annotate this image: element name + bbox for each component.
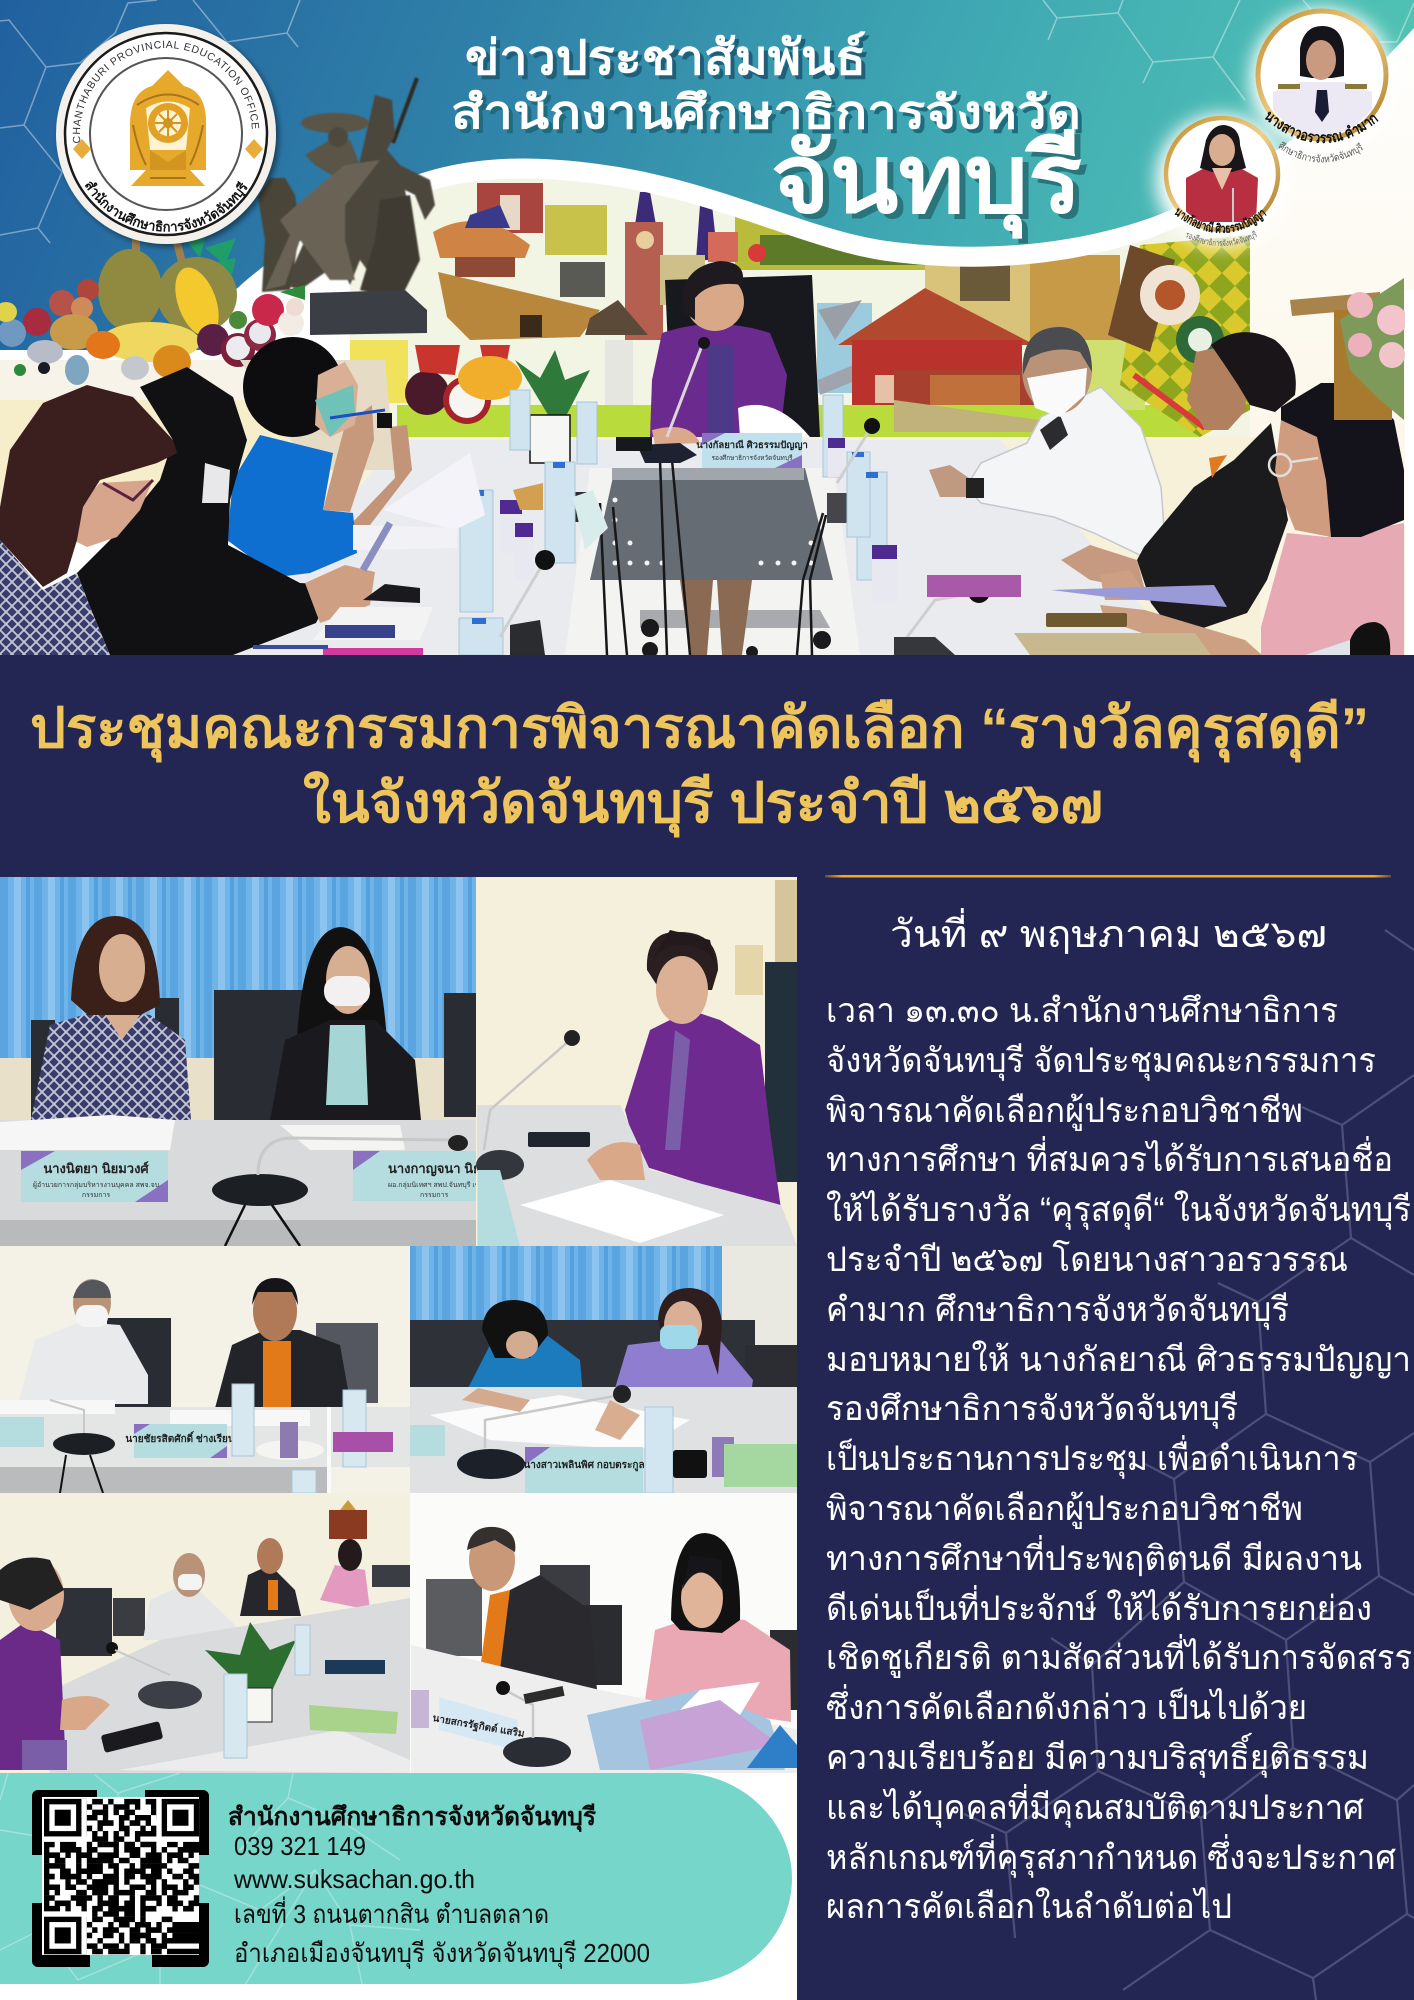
church bbox=[625, 192, 738, 340]
nameplate bbox=[21, 1151, 168, 1202]
modesty panel bbox=[590, 468, 833, 580]
divider rule bbox=[825, 875, 1391, 878]
body text bbox=[826, 992, 1412, 1926]
body text: พิจารณาคัดเลือกผู้ประกอบวิชาชีพ bbox=[826, 1490, 1303, 1529]
brochure bbox=[1051, 585, 1227, 607]
caption: deputy education officer: รองศึกษาธิการจังหวัดจันทบุรี bbox=[1186, 230, 1257, 246]
body text: พิจารณาคัดเลือกผู้ประกอบวิชาชีพ bbox=[826, 1092, 1303, 1131]
plant and pot bbox=[515, 350, 590, 463]
nameplate: chair bbox=[696, 433, 808, 468]
contact details: www.suksachan.go.th bbox=[233, 1864, 475, 1894]
nameplate: นางนิตยา นิยมวงศ์ bbox=[43, 1161, 149, 1176]
body text: ให้ได้รับรางวัล “คุรุสดุดี“ ในจังหวัดจันทบุรี bbox=[826, 1190, 1411, 1230]
photo: wide angle of meeting room bbox=[0, 1493, 410, 1773]
panel: news column bbox=[797, 875, 1414, 2000]
photo: two women writing bbox=[410, 1246, 797, 1493]
emblem bbox=[130, 70, 206, 186]
table microphone bbox=[476, 1030, 580, 1180]
body text: เวลา ๑๓.๓๐ น.สำนักงานศึกษาธิการ bbox=[826, 992, 1338, 1030]
title line two: ในจังหวัดจันทบุรี ประจำปี ๒๕๖๗ bbox=[303, 770, 1103, 838]
body text: ทางการศึกษา ที่สมควรได้รับการเสนอชื่อ bbox=[826, 1136, 1393, 1179]
contact details: สำนักงานศึกษาธิการจังหวัดจันทบุรี bbox=[228, 1803, 597, 1833]
caption: provincial education officer bbox=[1265, 112, 1378, 162]
caption: provincial education officer: ศึกษาธิการจังหวัดจันทบุรี bbox=[1278, 142, 1363, 162]
contact details: เลขที่ 3 ถนนตากสิน ตำบลตลาด bbox=[234, 1896, 549, 1929]
contact details bbox=[228, 1803, 650, 1969]
right attendees bbox=[927, 326, 1404, 655]
banner heading: ข่าวประชาสัมพันธ์ bbox=[465, 31, 866, 85]
table and floor bbox=[234, 437, 1148, 655]
body text: ดีเด่นเป็นที่ประจักษ์ ให้ได้รับการยกย่อง bbox=[826, 1585, 1372, 1628]
microphone bbox=[212, 1135, 468, 1246]
microphone bbox=[457, 1385, 631, 1479]
statue base bbox=[310, 290, 427, 335]
body text: มอบหมายให้ นางกัลยาณี ศิวธรรมปัญญา bbox=[826, 1340, 1411, 1379]
gazebo bbox=[585, 300, 648, 335]
banner heading: สำนักงานศึกษาธิการจังหวัด bbox=[451, 87, 1081, 138]
portrait: provincial education officer bbox=[1258, 11, 1386, 140]
panel: contact pill bbox=[0, 1773, 792, 1985]
body text: เป็นประธานการประชุม เพื่อดำเนินการ bbox=[826, 1435, 1358, 1479]
contact details: 039 321 149 bbox=[234, 1831, 366, 1861]
photo: chairperson in purple bbox=[476, 877, 797, 1246]
banner heading: จันทบุรี bbox=[771, 126, 1082, 239]
photo: man and woman in pink reviewing papers bbox=[410, 1493, 800, 1773]
hexagon lines bbox=[0, 0, 1414, 243]
woven mat bbox=[1108, 235, 1250, 437]
caption: provincial education officer: นางสาวอรวรรณ คำมาก bbox=[1265, 112, 1378, 144]
red house bbox=[838, 288, 1040, 432]
water bottles bbox=[232, 1384, 366, 1493]
nameplate bbox=[353, 1151, 506, 1201]
white wave bbox=[405, 170, 1180, 267]
white glow behind portraits bbox=[1250, 8, 1394, 152]
woman in pink bbox=[1261, 523, 1404, 655]
woman behind raised arm bbox=[350, 425, 412, 525]
chair base bbox=[640, 610, 831, 658]
tropical fruit mural bbox=[405, 371, 449, 415]
boat bbox=[438, 272, 600, 340]
cables bbox=[600, 460, 826, 655]
nameplate: ผู้อำนวยการกลุ่มบริหารงานบุคคล สพจ.จบ bbox=[33, 1181, 159, 1189]
water bottles bbox=[459, 390, 887, 655]
date: วันที่ ๙ พฤษภาคม ๒๕๖๗ bbox=[890, 908, 1327, 956]
nameplate: กรรมการ bbox=[420, 1192, 449, 1199]
contact details: อำเภอเมืองจันทบุรี จังหวัดจันทบุรี 22000 bbox=[234, 1938, 650, 1969]
papers bbox=[383, 453, 485, 530]
wall behind men bbox=[1090, 437, 1260, 655]
logo badge bbox=[56, 24, 282, 250]
nameplate bbox=[523, 1447, 645, 1493]
nameplate: นายสกรรัฐกิตต์ แสริม bbox=[432, 1712, 525, 1740]
nameplate: chair: นางกัลยาณี ศิวธรรมปัญญา bbox=[696, 439, 808, 451]
nameplate bbox=[125, 1424, 235, 1458]
man in white coat bbox=[966, 387, 1164, 557]
photo: two committee women bbox=[0, 877, 506, 1246]
banner heading: สำนักงานศึกษาธิการจังหวัด bbox=[455, 91, 1085, 142]
body text: หลักเกณฑ์ที่คุรุสภากำหนด ซึ่งจะประกาศ bbox=[826, 1834, 1396, 1878]
woman with glasses bbox=[73, 480, 153, 547]
table plant bbox=[205, 1622, 296, 1722]
nameplate: chair: รองศึกษาธิการจังหวัดจันทบุรี bbox=[712, 454, 793, 462]
woman in blue bbox=[227, 435, 357, 577]
woman in black bbox=[77, 367, 335, 655]
left attendees bbox=[0, 337, 485, 655]
microphone bbox=[496, 1681, 571, 1767]
booklet and papers bbox=[313, 607, 433, 640]
nameplate: นายชัยรสิตศักดิ์ ช่างเรียน bbox=[125, 1431, 235, 1445]
body text: ความเรียบร้อย มีความบริสุทธิ์ยุติธรรม bbox=[826, 1732, 1369, 1778]
water and dolphin bbox=[817, 303, 872, 393]
milk boxes and tent card bbox=[500, 438, 897, 603]
banner heading bbox=[451, 31, 1088, 244]
logo badge: CHANTHABURI PROVINCIAL EDUCATION OFFICE bbox=[72, 40, 260, 143]
banner heading: ข่าวประชาสัมพันธ์ bbox=[469, 35, 870, 89]
legs bbox=[680, 580, 752, 655]
body text: ทางการศึกษาที่ประพฤติตนดี มีผลงาน bbox=[826, 1535, 1362, 1578]
blue teal wave bbox=[0, 0, 1414, 350]
chairperson bbox=[616, 261, 820, 463]
body text: รองศึกษาธิการจังหวัดจันทบุรี bbox=[826, 1390, 1238, 1429]
portrait: deputy education officer bbox=[1166, 118, 1278, 230]
caption: deputy education officer bbox=[1174, 208, 1267, 246]
body text: จังหวัดจันทบุรี จัดประชุมคณะกรรมการ bbox=[826, 1042, 1376, 1081]
table microphones bbox=[500, 418, 990, 655]
mural backdrop bbox=[350, 170, 1250, 440]
nameplate: นางสาวเพลินพิศ กอบตระกูล bbox=[523, 1459, 645, 1472]
panel: title band bbox=[0, 655, 1414, 877]
statue of King Taksin bbox=[258, 78, 435, 300]
logo badge: สำนักงานศึกษาธิการจังหวัดจันทบุรี bbox=[85, 180, 248, 232]
fruits and gems bbox=[0, 227, 305, 400]
cloth behind bbox=[240, 360, 395, 470]
body text: ประจำปี ๒๕๖๗ โดยนางสาวอรวรรณ bbox=[826, 1240, 1348, 1279]
caption: deputy education officer: นางกัลยาณี ศิวธรรมปัญญา bbox=[1174, 208, 1267, 234]
body text: ซึ่งการคัดเลือกดังกล่าว เป็นไปด้วย bbox=[826, 1684, 1307, 1727]
flower stand bbox=[1290, 278, 1407, 420]
photo: two men in white coat and black suit bbox=[0, 1246, 410, 1493]
nameplate bbox=[432, 1697, 525, 1751]
body text: ผลการคัดเลือกในลำดับต่อไป bbox=[826, 1887, 1232, 1926]
body text: และได้บุคคลที่มีคุณสมบัติตามประกาศ bbox=[826, 1784, 1364, 1828]
panel: header banner bbox=[0, 0, 1414, 655]
title line one: ประชุมคณะกรรมการพิจารณาคัดเลือก “รางวัลคุรุสดุดี” bbox=[30, 696, 1369, 763]
body text: คำมาก ศึกษาธิการจังหวัดจันทบุรี bbox=[826, 1291, 1289, 1330]
QR code bbox=[32, 1790, 209, 1967]
banner heading: จันทบุรี bbox=[777, 131, 1088, 244]
microphone bbox=[50, 1400, 115, 1493]
nameplate: นางกาญจนา นิยนนา bbox=[388, 1161, 506, 1177]
man in black suit bbox=[1137, 423, 1288, 637]
nameplate: ผอ.กลุ่มนิเทศฯ สพป.จันทบุรี เขต ๒ bbox=[388, 1181, 491, 1189]
nameplate: กรรมการ bbox=[82, 1192, 110, 1199]
